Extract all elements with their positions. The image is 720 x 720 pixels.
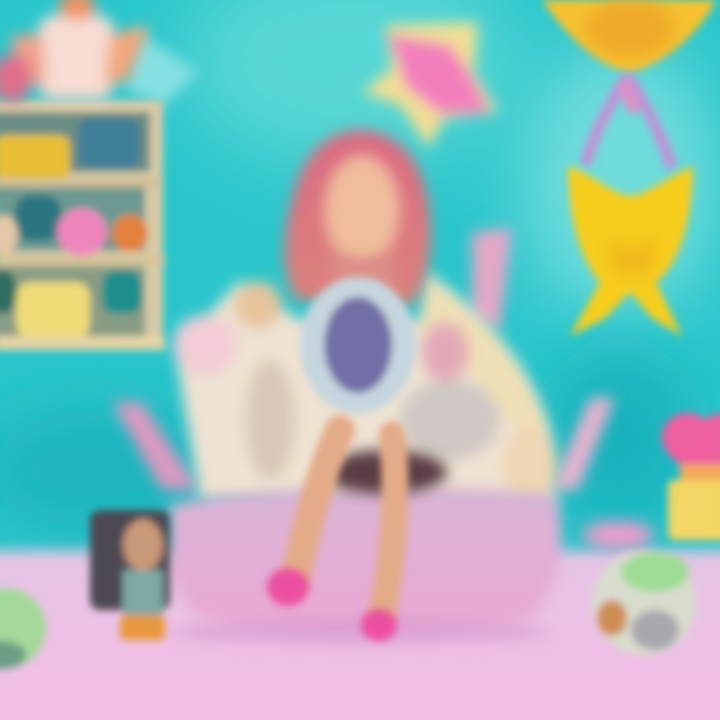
shelf <box>0 100 165 350</box>
face <box>324 155 400 265</box>
dark lap shadow <box>323 450 447 494</box>
pink beanbag <box>168 487 562 645</box>
yellow block <box>668 480 720 540</box>
hair <box>284 130 431 305</box>
pink star <box>362 22 498 148</box>
yellow balloon <box>542 0 716 72</box>
right side toys <box>662 413 720 540</box>
legs <box>295 430 395 615</box>
toy on top of shelf <box>0 0 150 102</box>
mirror <box>300 277 416 413</box>
ball left <box>0 588 46 669</box>
cream blanket behind doll <box>173 270 558 505</box>
floor <box>0 550 720 720</box>
beanbag cushion side ears <box>112 228 615 490</box>
doll <box>173 130 558 505</box>
pink heart <box>662 413 720 472</box>
ribbon <box>585 75 672 168</box>
pink shoes <box>267 568 397 641</box>
orange strip <box>680 464 720 482</box>
ball right <box>582 521 696 655</box>
yellow cat-shaped pendant <box>568 166 693 336</box>
small doll figure <box>90 510 170 640</box>
neck and torso <box>332 258 392 294</box>
